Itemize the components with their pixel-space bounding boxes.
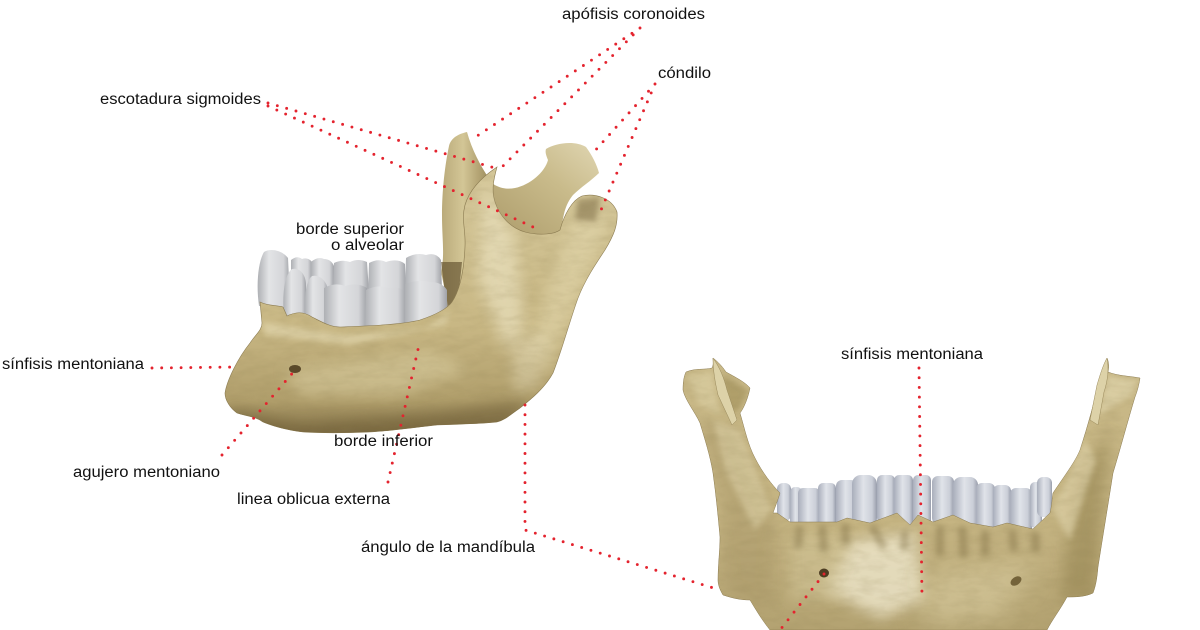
front bone shading xyxy=(680,355,1145,630)
leader: agujero mentoniano xyxy=(222,369,296,455)
far coronoid process and ramus xyxy=(441,132,490,305)
leader: ángulo de la mandíbula xyxy=(525,405,720,590)
label: cóndilo: cóndilo xyxy=(658,65,711,82)
left coronoid blade, front view xyxy=(713,358,737,425)
label: ángulo de la mandíbula: ángulo de la mandíbula xyxy=(361,539,535,556)
lower teeth, front view xyxy=(777,475,1052,534)
leader: sínfisis mentoniana, front view xyxy=(919,368,922,597)
label: sínfisis mentoniana, side view: sínfisis mentoniana xyxy=(2,356,144,373)
leader: linea oblicua externa xyxy=(388,345,419,482)
leader: apófisis coronoides xyxy=(471,28,640,172)
label: borde superior: borde superior xyxy=(296,221,404,238)
front teeth row xyxy=(283,269,447,332)
mental foramen, front left xyxy=(819,568,829,578)
mental foramen, side view xyxy=(289,365,301,373)
front view of the mandible xyxy=(680,355,1145,630)
far condyle and neck xyxy=(484,143,599,236)
front bone body xyxy=(683,358,1140,630)
side view of the mandible xyxy=(220,132,620,440)
label: borde inferior: borde inferior xyxy=(334,433,433,450)
shadow behind the molars xyxy=(441,262,462,308)
back teeth row xyxy=(258,250,442,308)
label: agujero mentoniano: agujero mentoniano xyxy=(73,464,220,481)
right coronoid blade, front view xyxy=(1090,358,1108,425)
leader: cóndilo xyxy=(592,84,655,210)
leader: foramen, front view xyxy=(780,574,824,630)
label: o alveolar: o alveolar xyxy=(331,237,404,254)
leader: escotadura sigmoides xyxy=(268,103,533,227)
label: apófisis coronoides: apófisis coronoides xyxy=(562,6,705,23)
label: escotadura sigmoides: escotadura sigmoides xyxy=(100,91,261,108)
side bone shading xyxy=(232,175,616,432)
leader: sínfisis mentoniana, side view xyxy=(152,367,235,368)
dotted leader lines xyxy=(152,28,922,630)
label: linea oblicua externa: linea oblicua externa xyxy=(237,491,390,508)
label: sínfisis mentoniana, front view: sínfisis mentoniana xyxy=(841,346,983,363)
mental foramen, front right xyxy=(1009,574,1023,588)
side bone body xyxy=(225,167,617,433)
labels xyxy=(2,6,983,556)
